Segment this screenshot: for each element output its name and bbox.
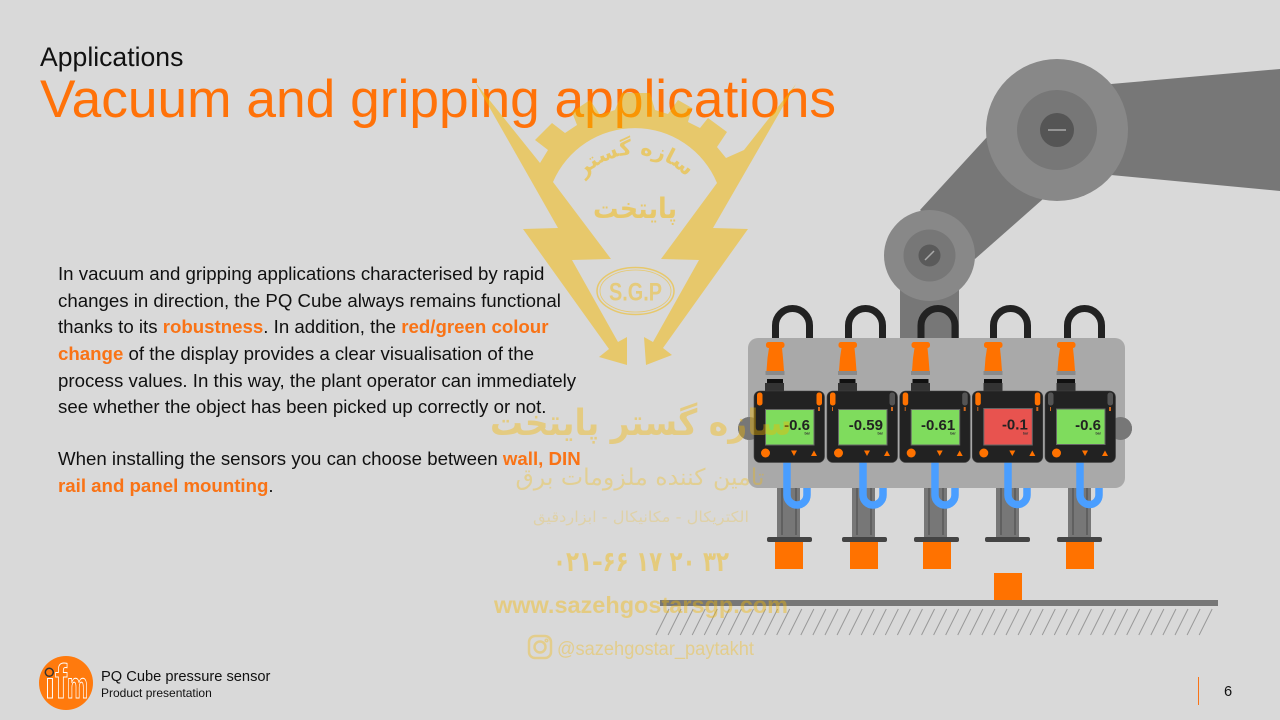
watermark logo bbox=[476, 83, 796, 365]
suction stems and grippers bbox=[767, 488, 1102, 601]
watermark tagline: تامین کننده ملزومات برق bbox=[516, 465, 764, 491]
title: Vacuum and gripping applications: Vacuum and gripping applications bbox=[40, 70, 836, 129]
sensor 3: -0.61 bar: -0.61 bbox=[921, 417, 955, 434]
floor with hatching bbox=[656, 600, 1218, 635]
watermark instagram icon bbox=[529, 636, 551, 658]
robot arm bbox=[884, 59, 1280, 340]
text block: application description bbox=[58, 263, 581, 496]
text block: application description: change of the display provides a clear visualisation of the bbox=[58, 343, 534, 364]
footer: product name: PQ Cube pressure sensor bbox=[101, 669, 270, 685]
sensor 2: -0.59 bar bbox=[827, 391, 898, 462]
subtitle: Applications: Applications bbox=[40, 42, 183, 72]
text block: application description: rail and panel mounting. bbox=[58, 475, 274, 496]
black cables bbox=[776, 308, 1102, 345]
orange connectors bbox=[765, 342, 1076, 392]
text block: application description: changes in direction, the PQ Cube always remains functional bbox=[58, 290, 561, 311]
sensor 1: -0.6 bar: -0.6 bbox=[784, 417, 810, 434]
page number with divider: 6 bbox=[1224, 684, 1232, 700]
text block: application description: When installing the sensors you can choose between wall, DIN bbox=[58, 448, 581, 469]
text block: application description: see whether the object has been picked up correctly or not. bbox=[58, 396, 546, 417]
sensor 5: -0.6 bar: -0.6 bbox=[1075, 417, 1101, 434]
sensor 4: -0.1 bar, red display: bar bbox=[1023, 432, 1029, 436]
watermark logo: S.G.P bbox=[609, 278, 662, 306]
manifold plate bbox=[738, 338, 1132, 488]
watermark company name: سازه گستر پایتخت bbox=[490, 402, 792, 444]
text block: application description: thanks to its robustness. In addition, the red/green colour bbox=[58, 316, 548, 337]
footer: ifm logo: i bbox=[45, 665, 55, 706]
sensor 5: -0.6 bar: bar bbox=[1096, 432, 1102, 436]
page number with divider bbox=[1198, 677, 1239, 705]
sensor 2: -0.59 bar: bar bbox=[878, 432, 884, 436]
watermark instagram handle: @sazehgostar_paytakht bbox=[557, 639, 755, 660]
sensor 2: -0.59 bar: -0.59 bbox=[849, 417, 883, 434]
sensor 3: -0.61 bar bbox=[900, 391, 970, 462]
watermark phone number: ۰۲۱–۶۶ ۱۷ ۲۰ ۳۲ bbox=[553, 545, 729, 578]
text block: application description: process values. In this way, the plant operator can immediately bbox=[58, 370, 576, 391]
footer: ifm logo bbox=[39, 656, 93, 710]
sensor 3: -0.61 bar: bar bbox=[950, 432, 956, 436]
sensor 5: -0.6 bar bbox=[1045, 391, 1116, 462]
sensor 4: -0.1 bar, red display: -0.1 bbox=[1002, 416, 1028, 434]
sensor 4: -0.1 bar, red display bbox=[972, 391, 1043, 462]
sensor 1: -0.6 bar: bar bbox=[805, 432, 811, 436]
blue tubes bbox=[787, 462, 1099, 505]
watermark categories: الکتریکال - مکانیکال - ابزاردقیق bbox=[533, 508, 749, 526]
text block: application description: In vacuum and gripping applications characterised by rapid bbox=[58, 263, 544, 284]
footer: ifm logo: f bbox=[55, 656, 68, 709]
footer: document type: Product presentation bbox=[101, 686, 212, 700]
watermark website: www.sazehgostarsgp.com bbox=[493, 592, 788, 618]
sensor 1: -0.6 bar bbox=[754, 391, 824, 462]
watermark logo: سازه گستر bbox=[584, 136, 690, 182]
watermark logo: پایتخت bbox=[593, 192, 677, 225]
